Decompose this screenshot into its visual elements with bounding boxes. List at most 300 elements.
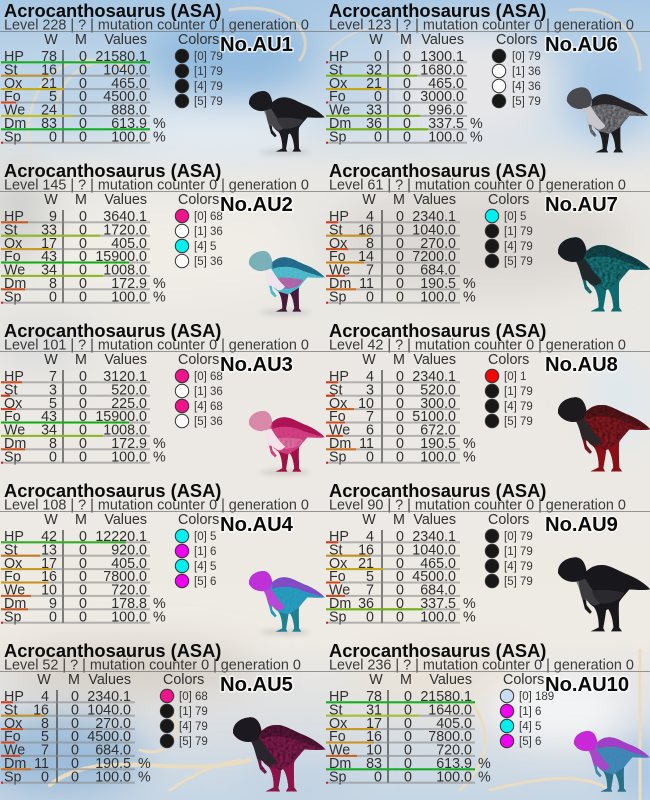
stats table: 8 [49, 436, 57, 452]
specimen label: No.AU7 [545, 194, 618, 216]
colors legend: [1] 79 [179, 706, 208, 718]
stats table: 21 [41, 76, 57, 92]
stats table: 2340.1 [87, 689, 131, 705]
stats table: 7800.0 [103, 569, 147, 585]
stats table: 0 [41, 769, 49, 785]
stats table [1, 192, 166, 305]
stats table: 33 [41, 222, 57, 238]
level line: Level 123 | ? | mutation counter 0 | generation 0 [329, 18, 634, 34]
panel: AU4 [0, 480, 325, 634]
stats table: 100.0 [95, 769, 131, 785]
stats table: % [478, 756, 491, 772]
panel: AU8 [325, 320, 650, 471]
stats table: 0 [79, 249, 87, 265]
stats table: 0 [71, 769, 79, 785]
stats table: Fo [4, 409, 21, 425]
stats table: 8 [49, 276, 57, 292]
colors legend: [0] 79 [194, 51, 223, 63]
icon: black dinosaur [249, 91, 325, 154]
stats table: 34 [41, 423, 57, 439]
stats table: 5 [41, 729, 49, 745]
colors legend: [0] 189 [519, 691, 554, 703]
stats table [326, 352, 476, 465]
stats table [326, 32, 483, 145]
colors legend: [4] 5 [194, 241, 216, 253]
stats table: 0 [71, 729, 79, 745]
stats table: % [463, 449, 476, 465]
stats table: 5100.0 [412, 409, 456, 425]
stats table: M [68, 672, 80, 688]
icon: cyan and magenta dinosaur [249, 571, 325, 634]
colors legend: Colors [488, 512, 529, 528]
colors legend: Colors [496, 32, 537, 48]
stats table: 43 [41, 249, 57, 265]
colors legend: [1] 36 [194, 386, 223, 398]
stats table: W [362, 512, 376, 528]
stats table: Sp [4, 129, 22, 145]
stats table: 16 [358, 542, 374, 558]
stats table: 225.0 [111, 396, 147, 412]
stats table: 0 [79, 76, 87, 92]
stats table: Sp [4, 449, 22, 465]
stats table: Ox [4, 716, 22, 732]
stats table: 0 [403, 116, 411, 132]
colors legend: [4] 79 [504, 401, 533, 413]
stats table: 9 [49, 209, 57, 225]
stats table: 7 [366, 263, 374, 279]
stats table: 0 [396, 369, 404, 385]
stats table: 0 [396, 583, 404, 599]
level line: Level 108 | ? | mutation counter 0 | generation 0 [4, 498, 309, 514]
icon: black and white dinosaur [567, 87, 648, 152]
stats table: % [463, 596, 476, 612]
stats table: 0 [396, 209, 404, 225]
stats table: 0 [79, 89, 87, 105]
stats table: 270.0 [95, 716, 131, 732]
stats table: 100.0 [436, 769, 472, 785]
stats table: 0 [374, 129, 382, 145]
colors legend: [4] 5 [519, 721, 541, 733]
stats table: 0 [396, 222, 404, 238]
stats table: 0 [404, 769, 412, 785]
stats table: M [400, 672, 412, 688]
stats table: 78 [41, 49, 57, 65]
stats table: 0 [366, 609, 374, 625]
title: Acrocanthosaurus (ASA) [329, 160, 546, 181]
stats table: M [75, 512, 87, 528]
colors legend [175, 192, 223, 268]
colors legend: [5] 79 [512, 96, 541, 108]
stats table: 11 [34, 756, 49, 772]
title: Acrocanthosaurus (ASA) [329, 480, 546, 501]
stats table: 996.0 [428, 103, 464, 119]
stats table: W [44, 192, 58, 208]
stats table: Values [413, 352, 456, 368]
title: Acrocanthosaurus (ASA) [4, 480, 221, 501]
stats table: Ox [4, 236, 22, 252]
stats table: 10 [358, 396, 374, 412]
stats table: 0 [79, 449, 87, 465]
stats table: % [153, 289, 166, 305]
stats table: Sp [329, 129, 347, 145]
stats table: Fo [329, 569, 346, 585]
colors legend: [0] 79 [512, 51, 541, 63]
stats table: HP [329, 209, 349, 225]
level line: Level 42 | ? | mutation counter 0 | generation 0 [329, 338, 626, 354]
stats table: 21 [366, 76, 382, 92]
stats table: 0 [79, 409, 87, 425]
stats table: Ox [4, 556, 22, 572]
icon: black dinosaur [558, 557, 650, 631]
stats table: 0 [396, 609, 404, 625]
stats table: St [329, 542, 343, 558]
stats table: St [4, 222, 18, 238]
stats table: 1680.0 [420, 62, 464, 78]
stats table: Fo [329, 249, 346, 265]
stats table: 17 [41, 236, 57, 252]
icon: black and teal dinosaur [558, 237, 650, 311]
title: Acrocanthosaurus (ASA) [329, 640, 546, 661]
stats table: 3 [49, 382, 57, 398]
stats table: M [393, 192, 405, 208]
colors legend: [4] 79 [504, 561, 533, 573]
stats table: 0 [71, 716, 79, 732]
stats table: 7 [366, 583, 374, 599]
colors legend: Colors [178, 192, 219, 208]
stats table: 0 [396, 236, 404, 252]
stats table: Ox [329, 556, 347, 572]
stats table: 12220.1 [95, 529, 147, 545]
colors legend: [4] 79 [504, 241, 533, 253]
stats table: 0 [366, 289, 374, 305]
stats table: 613.9 [111, 116, 147, 132]
stats table: 0 [79, 396, 87, 412]
stats table: HP [4, 49, 24, 65]
stats table: 7800.0 [428, 729, 472, 745]
stats table: 0 [49, 129, 57, 145]
stats table: 0 [396, 569, 404, 585]
colors legend: [1] 79 [504, 386, 533, 398]
stats table: 1040.0 [87, 702, 131, 718]
stats table: St [329, 382, 343, 398]
stats table: 5 [49, 89, 57, 105]
stats table: Fo [4, 569, 21, 585]
stats table: 8 [41, 716, 49, 732]
stats table: 16 [41, 62, 57, 78]
icon: magenta and cyan dinosaur [574, 731, 650, 792]
title: Acrocanthosaurus (ASA) [4, 640, 221, 661]
stats table: W [44, 32, 58, 48]
stats table: 83 [366, 756, 382, 772]
stats table: We [4, 423, 25, 439]
stats table: We [4, 583, 25, 599]
stats table: Dm [4, 116, 26, 132]
stats table: Dm [4, 596, 26, 612]
stats table: 8 [366, 236, 374, 252]
stats table: 0 [71, 702, 79, 718]
colors legend [485, 192, 533, 268]
stats table: 465.0 [420, 556, 456, 572]
stats table: 270.0 [420, 236, 456, 252]
stats table: M [393, 352, 405, 368]
stats table: 684.0 [95, 743, 131, 759]
stats table: HP [329, 529, 349, 545]
stats table: 0 [396, 276, 404, 292]
stats table: Values [104, 32, 147, 48]
specimen label: No.AU5 [220, 674, 293, 696]
stats table: Fo [4, 729, 21, 745]
stats table: Ox [329, 716, 347, 732]
stats table: 0 [71, 689, 79, 705]
stats table: Sp [329, 289, 347, 305]
stats table: Dm [329, 436, 351, 452]
colors legend: [0] 5 [504, 211, 526, 223]
stats table: 15900.0 [95, 409, 147, 425]
stats table: % [463, 289, 476, 305]
stats table: 100.0 [111, 289, 147, 305]
stats table: % [478, 769, 491, 785]
stats table: 17 [366, 716, 382, 732]
colors legend: Colors [503, 672, 544, 688]
stats table: 0 [403, 89, 411, 105]
colors legend: [5] 6 [519, 736, 541, 748]
colors legend: [4] 68 [194, 401, 223, 413]
stats table: St [329, 62, 343, 78]
stats table: Values [413, 512, 456, 528]
stats table: 520.0 [111, 382, 147, 398]
stats table: 0 [403, 62, 411, 78]
stats table: 83 [41, 116, 57, 132]
stats table: 6 [366, 423, 374, 439]
stats table: 7 [41, 743, 49, 759]
stats table: St [4, 702, 18, 718]
colors legend: [5] 79 [179, 736, 208, 748]
colors legend [485, 352, 533, 428]
stats table: Dm [329, 596, 351, 612]
colors legend: [0] 68 [179, 691, 208, 703]
stats table: Fo [329, 729, 346, 745]
stats table [326, 192, 476, 305]
stats table: 0 [396, 289, 404, 305]
colors legend: [5] 36 [194, 256, 223, 268]
stats table: 16 [33, 702, 49, 718]
stats table: 0 [79, 103, 87, 119]
stats table: 888.0 [111, 103, 147, 119]
stats table: 21 [358, 556, 374, 572]
stats table: % [138, 769, 151, 785]
stats table: 7200.0 [412, 249, 456, 265]
stats table: 4500.0 [412, 569, 456, 585]
colors legend: [1] 79 [504, 226, 533, 238]
stats table: % [463, 609, 476, 625]
stats table: 0 [79, 423, 87, 439]
colors legend: [1] 79 [194, 66, 223, 78]
colors legend: Colors [178, 352, 219, 368]
stats table: M [75, 192, 87, 208]
stats table: 16 [366, 729, 382, 745]
stats table [1, 32, 166, 145]
stats table: 920.0 [111, 542, 147, 558]
stats table: Sp [329, 449, 347, 465]
stats table: 0 [366, 449, 374, 465]
stats table: Values [413, 192, 456, 208]
stats table: HP [4, 529, 24, 545]
stats table: 0 [403, 49, 411, 65]
panel: AU10 [325, 640, 650, 792]
stats table: 0 [79, 289, 87, 305]
stats table: 7 [366, 409, 374, 425]
stats table: Values [421, 32, 464, 48]
stats table: M [393, 512, 405, 528]
stats table: 0 [79, 49, 87, 65]
stats table: % [153, 449, 166, 465]
stats table: 0 [79, 116, 87, 132]
stats table: 0 [79, 436, 87, 452]
stats table: 0 [71, 756, 79, 772]
stats table: 1040.0 [412, 222, 456, 238]
stats table: We [4, 263, 25, 279]
stats table: % [463, 276, 476, 292]
stats table: % [463, 436, 476, 452]
title: Acrocanthosaurus (ASA) [4, 320, 221, 341]
icon: cyan, white and magenta dinosaur [249, 251, 325, 314]
stats table: W [362, 352, 376, 368]
colors legend: [0] 68 [194, 371, 223, 383]
stats table: 0 [404, 702, 412, 718]
stats table: W [369, 672, 383, 688]
stats table: 0 [79, 236, 87, 252]
stats table: 1040.0 [103, 62, 147, 78]
stats table: 178.8 [111, 596, 147, 612]
stats table: 0 [396, 423, 404, 439]
stats table: 11 [359, 436, 374, 452]
stats table: 0 [49, 609, 57, 625]
stats table: 100.0 [111, 449, 147, 465]
panel: AU5 [0, 640, 325, 791]
stats table: 14 [358, 249, 374, 265]
stats table [1, 352, 166, 465]
stats table: 0 [404, 756, 412, 772]
stats table: 10 [366, 743, 382, 759]
colors legend: Colors [488, 192, 529, 208]
stats table: M [400, 32, 412, 48]
colors legend: [0] 79 [504, 531, 533, 543]
stats table: St [4, 382, 18, 398]
colors legend [175, 352, 223, 428]
level line: Level 236 | ? | mutation counter 0 | generation 0 [329, 658, 634, 674]
colors legend: [4] 36 [512, 81, 541, 93]
stats table: Fo [329, 89, 346, 105]
stats table: 3 [366, 382, 374, 398]
stats table: We [4, 743, 25, 759]
stats table: 17 [41, 556, 57, 572]
stats table: 36 [366, 116, 382, 132]
stats table: We [329, 743, 350, 759]
stats table: Dm [329, 756, 351, 772]
level line: Level 90 | ? | mutation counter 0 | generation 0 [329, 498, 626, 514]
stats table [1, 512, 166, 625]
colors legend [175, 512, 219, 588]
stats table: 720.0 [111, 583, 147, 599]
colors legend: [5] 79 [504, 576, 533, 588]
stats table: Ox [4, 76, 22, 92]
stats table: 16 [41, 569, 57, 585]
stats table: 0 [403, 76, 411, 92]
stats table: HP [329, 369, 349, 385]
title: Acrocanthosaurus (ASA) [329, 0, 546, 21]
stats table: 42 [41, 529, 57, 545]
colors legend: [1] 6 [194, 546, 216, 558]
stats table: 0 [79, 263, 87, 279]
stats table: 0 [396, 596, 404, 612]
colors legend: [1] 36 [194, 226, 223, 238]
colors legend: [0] 5 [194, 531, 216, 543]
stats table: Values [88, 672, 131, 688]
stats table: 4 [41, 689, 49, 705]
stats table: Values [104, 512, 147, 528]
stats table: HP [329, 689, 349, 705]
stats table: 172.9 [111, 276, 147, 292]
stats table: 337.5 [420, 596, 456, 612]
stats table: 337.5 [428, 116, 464, 132]
stats table: Dm [4, 276, 26, 292]
stats table: 0 [396, 542, 404, 558]
stats table: M [75, 352, 87, 368]
stats table: % [470, 116, 483, 132]
stats table: 100.0 [111, 129, 147, 145]
stats table: 0 [79, 609, 87, 625]
stats table: 4 [366, 529, 374, 545]
colors legend: [5] 79 [504, 256, 533, 268]
stats table: Ox [329, 236, 347, 252]
colors legend: Colors [178, 512, 219, 528]
stats table: Values [104, 192, 147, 208]
stats table: 3640.1 [103, 209, 147, 225]
stats table: 13 [41, 542, 57, 558]
stats table: 11 [359, 276, 374, 292]
stats table: 190.5 [420, 276, 456, 292]
stats table: 31 [366, 702, 382, 718]
stats table: 0 [79, 209, 87, 225]
colors legend [160, 672, 208, 748]
stats table: 405.0 [111, 236, 147, 252]
stats table: 0 [79, 583, 87, 599]
level line: Level 52 | ? | mutation counter 0 | generation 0 [4, 658, 301, 674]
stats table: St [4, 62, 18, 78]
colors legend: [0] 68 [194, 211, 223, 223]
stats table: Values [429, 672, 472, 688]
specimen label: No.AU3 [220, 354, 293, 376]
stats table: 1640.0 [428, 702, 472, 718]
stats table: 2340.1 [412, 209, 456, 225]
stats table: W [44, 352, 58, 368]
stats table: Fo [329, 409, 346, 425]
stats table: 100.0 [111, 609, 147, 625]
title: Acrocanthosaurus (ASA) [4, 0, 221, 21]
stats table: 2340.1 [412, 369, 456, 385]
stats table: 0 [79, 369, 87, 385]
icon: black and red dinosaur [558, 397, 650, 471]
stats table: Dm [329, 116, 351, 132]
stats table: 32 [366, 62, 382, 78]
colors legend [485, 512, 533, 588]
stats table [326, 512, 476, 625]
stats table: % [470, 129, 483, 145]
stats table: 34 [41, 263, 57, 279]
stats table: 0 [404, 716, 412, 732]
stats table: 2340.1 [412, 529, 456, 545]
stats table: 190.5 [420, 436, 456, 452]
